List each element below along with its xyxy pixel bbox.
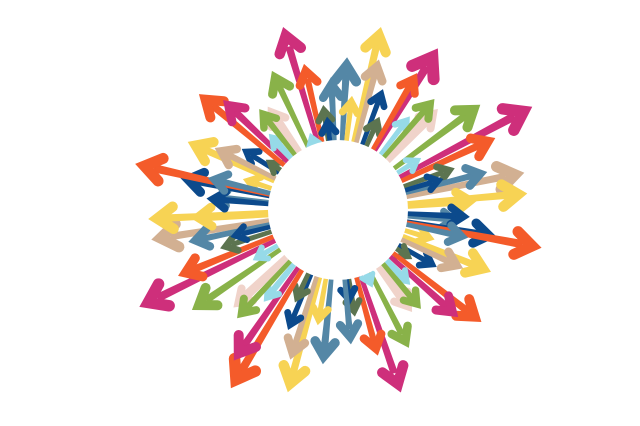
arrow: green south-east bbox=[373, 254, 423, 309]
arrow: dark green right bbox=[396, 163, 451, 195]
arrow: magenta north-west bbox=[222, 99, 298, 173]
arrow: yellow upper left bbox=[191, 136, 284, 193]
arrow: dark blue top bbox=[321, 122, 338, 147]
arrow: orange upper right bbox=[363, 75, 421, 159]
arrow: steel blue tall bbox=[331, 65, 357, 147]
arrow: light blue lower bbox=[359, 266, 376, 286]
arrow: magenta top bbox=[275, 33, 330, 152]
arrow: green west-south bbox=[193, 237, 291, 314]
arrow: yellow small lower right bbox=[397, 222, 431, 245]
centre white circle bbox=[268, 140, 408, 280]
arrow: magenta lower bbox=[348, 267, 408, 387]
arrow: dark blue east bbox=[401, 205, 463, 225]
arrow: steel blue west bbox=[194, 215, 277, 249]
arrow: steel blue right bbox=[398, 165, 482, 203]
arrow: yellow small top bbox=[338, 101, 359, 147]
arrow: dark green north-west bbox=[266, 158, 289, 179]
arrow: light blue south-east bbox=[378, 252, 411, 285]
arrow: light blue upper right bbox=[372, 117, 412, 163]
arrow: dark green lower bbox=[341, 272, 361, 312]
arrow: steel blue bottom bbox=[314, 273, 342, 357]
arrow: tan south-east bbox=[392, 229, 460, 273]
arrow: yellow west outer bbox=[157, 202, 275, 230]
arrow: orange lower right long bbox=[399, 210, 534, 257]
arrow: green upper right bbox=[374, 99, 436, 167]
arrow: magenta lower left bbox=[230, 257, 310, 359]
arrow: orange top bbox=[297, 69, 332, 150]
arrow: pink upper right bbox=[377, 108, 439, 170]
arrow: yellow lower right bbox=[393, 224, 487, 278]
arrow: green north-west bbox=[257, 109, 305, 164]
arrow: orange south-east bbox=[382, 241, 481, 325]
arrow: orange north-west bbox=[199, 92, 296, 177]
arrow: magenta upper right bbox=[361, 51, 443, 162]
arrow: magenta west-south bbox=[143, 227, 286, 313]
arrow: tan west bbox=[159, 209, 277, 249]
arrow: orange west-south bbox=[182, 225, 283, 282]
arrow: steel blue upper left bbox=[213, 172, 278, 203]
arrow: tan bottom bbox=[284, 268, 327, 355]
arrow: tan north-west bbox=[217, 143, 285, 189]
arrow: dark blue lower right bbox=[399, 211, 490, 245]
arrow: orange right-up bbox=[392, 132, 492, 192]
arrow: yellow small upper left bbox=[246, 174, 279, 197]
arrow: green lower left bbox=[236, 251, 300, 319]
arrow: steel blue second bbox=[323, 84, 344, 147]
arrow: magenta right-up bbox=[389, 101, 529, 191]
arrow: yellow long top bbox=[342, 33, 389, 150]
arrow: dark blue south-east bbox=[390, 236, 435, 270]
arrow: dark blue bottom bbox=[284, 266, 320, 327]
arrow: green right-up bbox=[383, 101, 480, 180]
arrow: tan top bbox=[346, 64, 386, 151]
arrow: dark green south-east bbox=[388, 240, 411, 261]
arrow: dark blue upper left bbox=[186, 170, 277, 207]
arrow: yellow long bottom bbox=[280, 269, 332, 386]
arrow: pink lower left bbox=[233, 248, 297, 309]
arrow: green top-left bbox=[267, 74, 319, 156]
arrow: dark green upper bbox=[358, 119, 384, 154]
arrow: dark blue north-west bbox=[243, 146, 288, 182]
arrow: orange upper left long bbox=[142, 155, 278, 207]
arrow: dark blue right bbox=[397, 174, 440, 198]
arrow: light blue lower left bbox=[262, 255, 303, 302]
arrow: dark blue west inner bbox=[213, 191, 275, 213]
arrow: steel blue east bbox=[401, 208, 454, 227]
arrow: tan right bbox=[398, 163, 517, 209]
arrow: magenta south-east bbox=[379, 246, 459, 319]
arrow: light blue west-south bbox=[254, 237, 286, 263]
arrow: pink north-west bbox=[265, 108, 309, 162]
arrow: yellow small bottom bbox=[311, 272, 334, 320]
arrow: dark green bottom bbox=[291, 265, 317, 300]
arrow: orange lower bbox=[346, 269, 385, 351]
arrow: yellow right inner bbox=[401, 191, 471, 215]
arrow: dark blue west bbox=[234, 219, 278, 242]
arrow: dark blue upper bbox=[354, 92, 388, 153]
arrow: light blue right-up bbox=[389, 155, 420, 181]
arrow: pink south-east bbox=[369, 257, 415, 311]
arrow: dark green top bbox=[317, 110, 336, 148]
arrow: light blue top-left bbox=[306, 135, 322, 152]
arrow: orange lower left bbox=[226, 259, 315, 386]
arrow: steel blue lower bbox=[335, 273, 359, 338]
arrow: light blue north-west bbox=[268, 133, 300, 167]
arrow: green lower bbox=[359, 263, 413, 345]
arrow: dark blue lower bbox=[339, 273, 356, 300]
arrow: yellow right outer bbox=[401, 183, 519, 215]
arrow: steel blue lower right bbox=[399, 215, 463, 244]
arrow: dark green west bbox=[224, 223, 279, 253]
arrow: steel blue west inner bbox=[216, 190, 275, 211]
arrow: yellow west inner bbox=[198, 204, 275, 227]
